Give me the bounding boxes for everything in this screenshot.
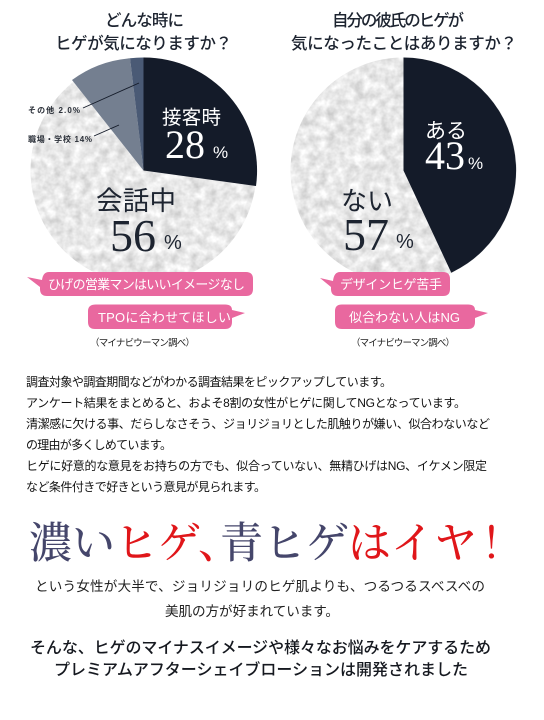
text block: survey summary: の理由が多くしめています。 [26,437,172,452]
text block: survey summary: 調査対象や調査期間などがわかる調査結果をピックアップしています。 [26,374,392,389]
text block: most women prefer smooth skin [35,579,485,619]
text block: survey summary: ヒゲに好意的な意見をお持ちの方でも、似合っていない、無精ひげはNG、イケメン限定 [26,458,487,473]
value: 56% [110,210,182,261]
text block: survey summary: アンケート結果をまとめると、およそ8割の女性がヒゲに関してNGとなっています。 [26,395,466,410]
value: 43% [425,133,483,178]
slice: yes 43% [404,58,516,273]
text block: survey summary: 清潔感に欠ける事、だらしなさそう、ジョリジョリとした肌触りが嫌い、似合わないなど [26,416,490,431]
text block: survey summary [26,374,490,494]
slice: customer service 28% [144,57,257,186]
label: other 2.0%: その他 2.0% [28,105,80,115]
slice: workplace/school 14% [72,58,144,170]
leader line: workplace/school [94,125,119,136]
callout: TPO: TPOに合わせてほしい [98,310,231,325]
callout: salesman image [27,272,253,296]
label: no: ない [341,186,393,216]
headline: dislike dark and blue beards: 濃い [29,510,115,571]
leader line: other [83,83,139,108]
pie chart: when beards bother [28,57,257,284]
slice: other 2% [130,57,144,171]
heading: right question: 自分の彼氏のヒゲが [332,10,464,30]
panel: right survey [290,10,517,349]
value: 28% [165,122,228,167]
text block: product development statement: そんな、ヒゲのマイナスイメージや様々なお悩みをケアするため [30,639,491,657]
label: conversation: 会話中 [96,186,176,216]
source note: （マイナビウーマン調べ） [351,337,455,349]
label: workplace/school 14%: 職場・学校 14% [28,134,92,144]
value: 43%: 43 [425,133,465,178]
value: 28%: % [213,143,228,162]
value: 56%: % [164,232,182,254]
label: yes: ある [425,120,467,143]
value: 43%: % [468,154,483,173]
heading: left question: ヒゲが気になりますか？ [55,33,232,53]
headline: dislike dark and blue beards: はイヤ [348,510,477,571]
value: 57%: 57 [343,209,389,260]
heading: right question [291,10,517,53]
source note: （マイナビウーマン調べ） [90,337,195,349]
pie chart: noticed boyfriend's beard [290,57,517,284]
heading: right question: 気になったことはありますか？ [291,34,517,53]
heading: left question: どんな時に [105,11,184,30]
callout: design beard [320,272,450,296]
value: 28%: 28 [165,122,205,167]
callout: design beard: デザインヒゲ苦手 [340,277,442,292]
value: 57%: % [396,231,414,253]
value: 57% [343,209,414,260]
text block: survey summary: など条件付きで好きという意見が見られます。 [26,479,266,494]
callout: TPO [88,304,245,329]
callout: doesn't suit: 似合わない人はNG [349,310,460,325]
headline: dislike dark and blue beards: ヒゲ [115,510,201,571]
value: 56%: 56 [110,210,156,261]
text block: product development statement: プレミアムアフターシェイブローションは開発されました [54,660,468,679]
heading: left question [55,11,232,53]
headline: dislike dark and blue beards: 、 [198,510,241,571]
callout: doesn't suit [335,304,488,329]
text block: most women prefer smooth skin: 美肌の方が好まれています。 [165,604,339,619]
headline: dislike dark and blue beards: 青ヒゲ [220,510,349,571]
text block: product development statement [30,639,491,679]
label: customer service: 接客時 [162,107,221,129]
text block: most women prefer smooth skin: という女性が大半で、ジョリジョリのヒゲ肌よりも、つるつるスベスベの [35,579,485,594]
headline: dislike dark and blue beards: ！ [470,510,513,571]
callout: salesman image: ひげの営業マンはいいイメージなし [48,277,245,292]
panel: left survey [27,11,257,349]
